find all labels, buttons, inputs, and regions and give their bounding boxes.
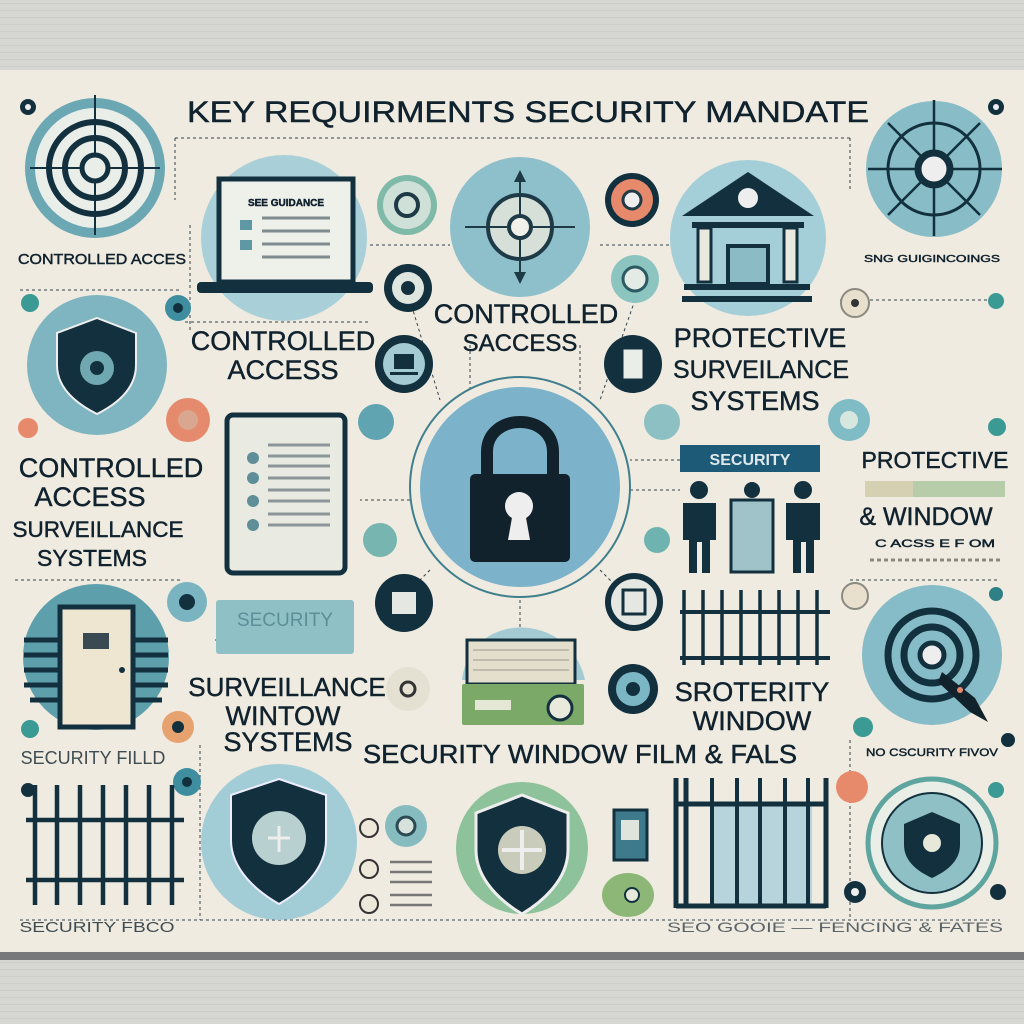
icon: shield left [27, 295, 167, 435]
icon: orange ring [605, 173, 659, 227]
label: controlled access surveillance systems: CONTROLLED [19, 453, 203, 483]
icon: list with bullets [360, 805, 432, 913]
label: security film left: SECURITY FILLD [21, 748, 165, 768]
icon: crosshair top right [866, 100, 1002, 237]
icon: building [670, 160, 826, 316]
icon: crosshair [450, 157, 590, 297]
label: controlled access top left: CONTROLLED ACCES [18, 252, 186, 268]
small decorative dots [18, 99, 1015, 903]
label: controlled saccess centre: SACCESS [463, 330, 577, 357]
icon: people at door [683, 481, 820, 573]
icon: shield target lower right [868, 779, 996, 907]
label: protective surveillance systems: PROTECTIVE [674, 323, 846, 353]
icon: document node right [605, 573, 663, 631]
icon: target with flashlight [862, 585, 1002, 725]
label: controlled access centre left: CONTROLLED [191, 326, 375, 356]
title: KEY REQUIRMENTS SECURITY MANDATE [187, 96, 869, 129]
icon: fence upper right [680, 590, 830, 665]
icon: laptop left small ring [386, 667, 430, 711]
icon: ring lower right [608, 664, 658, 714]
label: protective window [859, 447, 1008, 560]
security banner [680, 445, 820, 472]
icon: gate [676, 778, 826, 908]
label: controlled access surveillance systems: ACCESS [34, 482, 146, 512]
icon: window device [462, 628, 585, 725]
label: controlled access centre left: ACCESS [227, 355, 339, 385]
icon: orange circle [166, 398, 210, 442]
icon: laptop node [375, 335, 433, 393]
icon: laptop [197, 155, 373, 321]
icon: dark ring 285 [384, 264, 432, 312]
icon: fence lower left [26, 785, 184, 905]
label: fencing and gates: SEO GOOIE — FENCING & FATES [667, 919, 1003, 935]
label: surveillance window systems: WINTOW [226, 701, 341, 731]
label: srotertity window: WINDOW [693, 706, 812, 736]
icon: document node left [375, 574, 433, 632]
label: srotertity window: SROTERITY [675, 677, 829, 707]
label: protective window: & WINDOW [859, 503, 993, 531]
icon: tablet node [604, 335, 662, 393]
label: protective surveillance systems: SURVEILANCE [673, 356, 849, 384]
label: protective surveillance systems: SYSTEMS [690, 386, 820, 416]
icon: teal ring [611, 255, 659, 303]
icon: small ring 1 [377, 175, 437, 235]
label: protective window: PROTECTIVE [862, 447, 1008, 473]
label: security fbco bottom left: SECURITY FBCO [20, 919, 174, 936]
central padlock [410, 377, 630, 597]
security sign [216, 600, 354, 654]
label: top right garbled: SNG GUIGINCOINGS [864, 254, 1000, 265]
label: protective window: C ACSS E F OM [875, 538, 995, 550]
label: controlled access surveillance systems: SYSTEMS [37, 545, 147, 571]
icon: document and ring [602, 810, 654, 917]
icon: laptop: SEE GUIDANCE [248, 198, 324, 209]
security banner: SECURITY [710, 452, 791, 469]
security sign: SECURITY [237, 610, 333, 631]
icon: shield green [456, 782, 588, 914]
icon: shield with plus [201, 764, 357, 920]
icon: door with bars [23, 584, 169, 730]
label: controlled access surveillance systems: SURVEILLANCE [13, 517, 183, 542]
label: controlled saccess centre: CONTROLLED [434, 299, 618, 329]
label: surveillance window systems: SURVEILLANCE [188, 672, 386, 702]
icon: tablet checklist [227, 415, 345, 573]
label: security window film and fals: SECURITY WINDOW FILM & FALS [363, 739, 797, 769]
icon: target top left [25, 95, 165, 238]
label: surveillance window systems: SYSTEMS [223, 727, 353, 757]
label: security film right: NO CSCURITY FIVOV [866, 747, 999, 759]
